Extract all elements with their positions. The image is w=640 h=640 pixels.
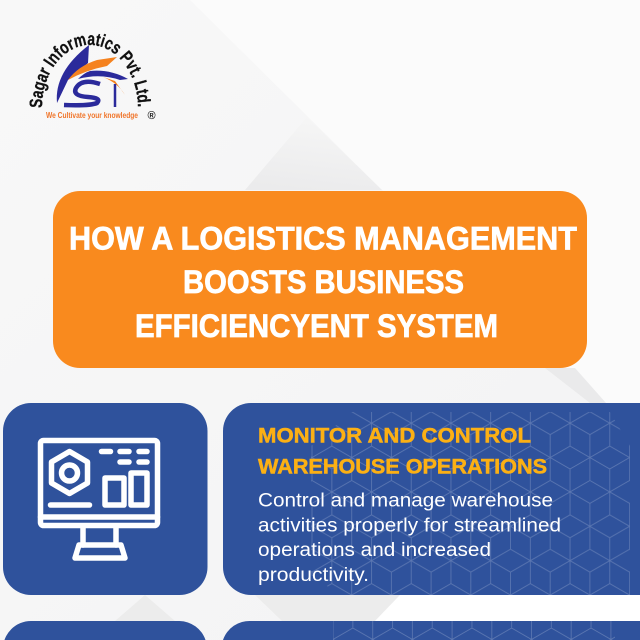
panel heading [258,424,547,478]
logo: Sagar Informatics [29,34,156,122]
panel body text [258,490,561,586]
panel body text: operations and increased [258,540,491,561]
icon: monitor with gear and bar chart [40,440,158,558]
panel body text: activities properly for streamlined [258,516,561,536]
logo tagline: We Cultivate your knowledge [46,111,138,120]
panel: second icon card [3,621,206,640]
panel: second text card [223,621,640,640]
hexagon cube pattern [333,621,615,640]
title text: HOW A LOGISTICS MANAGEMENT [69,220,577,256]
logo name arc: Sagar Informatics Pvt. Ltd. [29,34,151,108]
registered mark: ® [147,110,156,122]
logo emblem [57,45,128,107]
hexagon cube pattern [311,412,630,595]
title text: EFFICIENCYENT SYSTEM [135,308,498,344]
title text [69,220,577,344]
panel: monitor and control warehouse operations [223,403,640,595]
panel: icon card [3,403,208,595]
title banner [53,191,587,368]
panel heading: MONITOR AND CONTROL [258,424,531,448]
panel body text: productivity. [258,565,369,586]
panel heading: WAREHOUSE OPERATIONS [258,454,547,478]
title text: BOOSTS BUSINESS [183,264,464,300]
panel body text: Control and manage warehouse [258,490,553,512]
